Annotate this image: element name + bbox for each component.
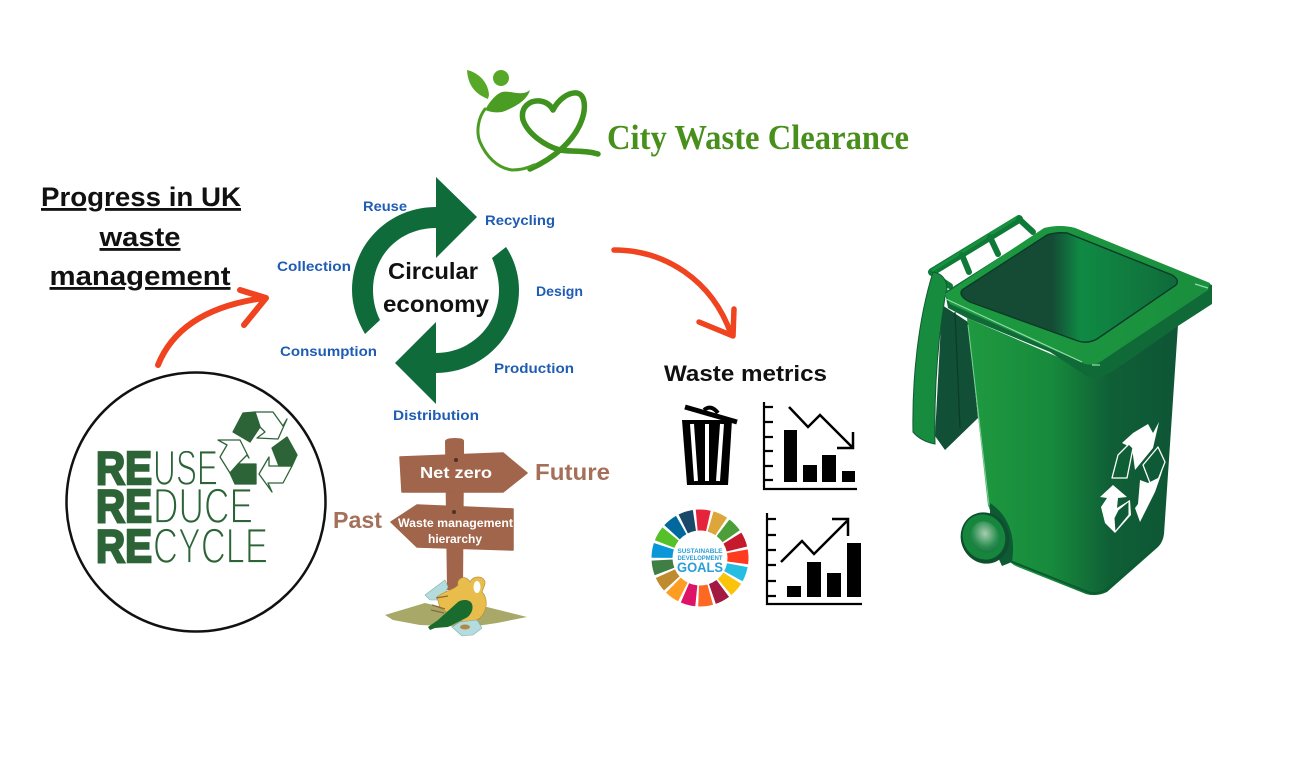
sign text: waste management hierarchy xyxy=(398,518,513,546)
icon: vase, bottle and litter xyxy=(425,577,486,636)
bin hinge handle xyxy=(932,217,1033,286)
heading: waste metrics: Waste metrics xyxy=(664,361,827,386)
arrow: circular economy to waste metrics xyxy=(614,250,734,336)
heading: Progress in UK waste management: management xyxy=(50,261,230,291)
illustration: green wheelie bin xyxy=(913,217,1212,595)
chart: falling bars xyxy=(764,402,857,489)
stage labels xyxy=(277,198,583,423)
stage labels: Reuse xyxy=(363,198,407,214)
bin body xyxy=(967,318,1178,595)
badge wordmark: DUCE xyxy=(153,478,253,534)
heading: Progress in UK waste management xyxy=(41,182,242,291)
diagram centre label xyxy=(383,258,489,317)
bin base band xyxy=(1010,542,1160,593)
logo wordmark: City Waste Clearance xyxy=(607,118,909,157)
stage labels: Distribution xyxy=(393,407,479,423)
stage labels: Collection xyxy=(277,258,351,274)
arrow: logo circle to circular economy xyxy=(158,290,266,365)
bin rim xyxy=(945,226,1212,379)
icon: white recycling symbol on bin xyxy=(1100,422,1165,533)
sign text: waste management hierarchy: hierarchy xyxy=(428,534,483,546)
badge wordmark: RE xyxy=(96,442,152,494)
logo: City Waste Clearance xyxy=(467,70,909,170)
bin wheel xyxy=(952,503,1018,572)
bin rim highlights xyxy=(946,284,1208,365)
icon: ground xyxy=(385,603,527,627)
label: future: Future xyxy=(535,459,610,485)
sign: net zero xyxy=(400,453,527,492)
stage labels: Consumption xyxy=(280,343,377,359)
bin open lid xyxy=(913,272,978,450)
sign text: waste management hierarchy: Waste management xyxy=(398,518,513,530)
panel: reuse reduce recycle badge xyxy=(66,372,326,632)
chart: rising bars xyxy=(767,513,862,604)
arrow: upper circular arrow xyxy=(352,177,477,334)
icon: sustainable development goals wheel xyxy=(642,500,758,616)
diagram centre label: economy xyxy=(383,291,489,317)
panel: waste metrics xyxy=(642,361,862,616)
signpost pole xyxy=(445,438,464,590)
badge wordmark: RE xyxy=(96,480,152,532)
badge wordmark: USE xyxy=(153,440,218,496)
diagram centre label: Circular xyxy=(388,258,478,284)
badge wordmark xyxy=(96,440,268,574)
badge circle xyxy=(66,372,326,632)
stage labels: Production xyxy=(494,360,574,376)
badge wordmark: RE xyxy=(96,520,152,572)
sign text: net zero: Net zero xyxy=(420,465,492,482)
diagram: circular economy xyxy=(277,177,583,423)
bin opening xyxy=(961,233,1177,342)
heading: Progress in UK waste management: waste xyxy=(98,222,180,252)
badge wordmark: CYCLE xyxy=(153,518,268,574)
icon: sustainable development goals wheel: DEVELOPMENT xyxy=(678,555,723,562)
signpost: past to future xyxy=(333,438,610,636)
icon: heart and leaf logo xyxy=(467,70,598,170)
sign nails xyxy=(452,458,458,514)
label: past: Past xyxy=(333,507,382,533)
arrow: lower circular arrow xyxy=(395,247,519,404)
heading: Progress in UK waste management: Progress in UK xyxy=(41,182,242,212)
icon: recycling symbol xyxy=(218,412,297,492)
icon: waste bin xyxy=(682,407,737,485)
bin body highlight xyxy=(968,325,989,505)
icon: sustainable development goals wheel: GOALS xyxy=(677,559,723,575)
icon: sustainable development goals wheel: SUSTAINABLE xyxy=(678,548,723,555)
stage labels: Design xyxy=(536,283,583,299)
stage labels: Recycling xyxy=(485,212,555,228)
sign: waste management hierarchy xyxy=(391,505,513,550)
